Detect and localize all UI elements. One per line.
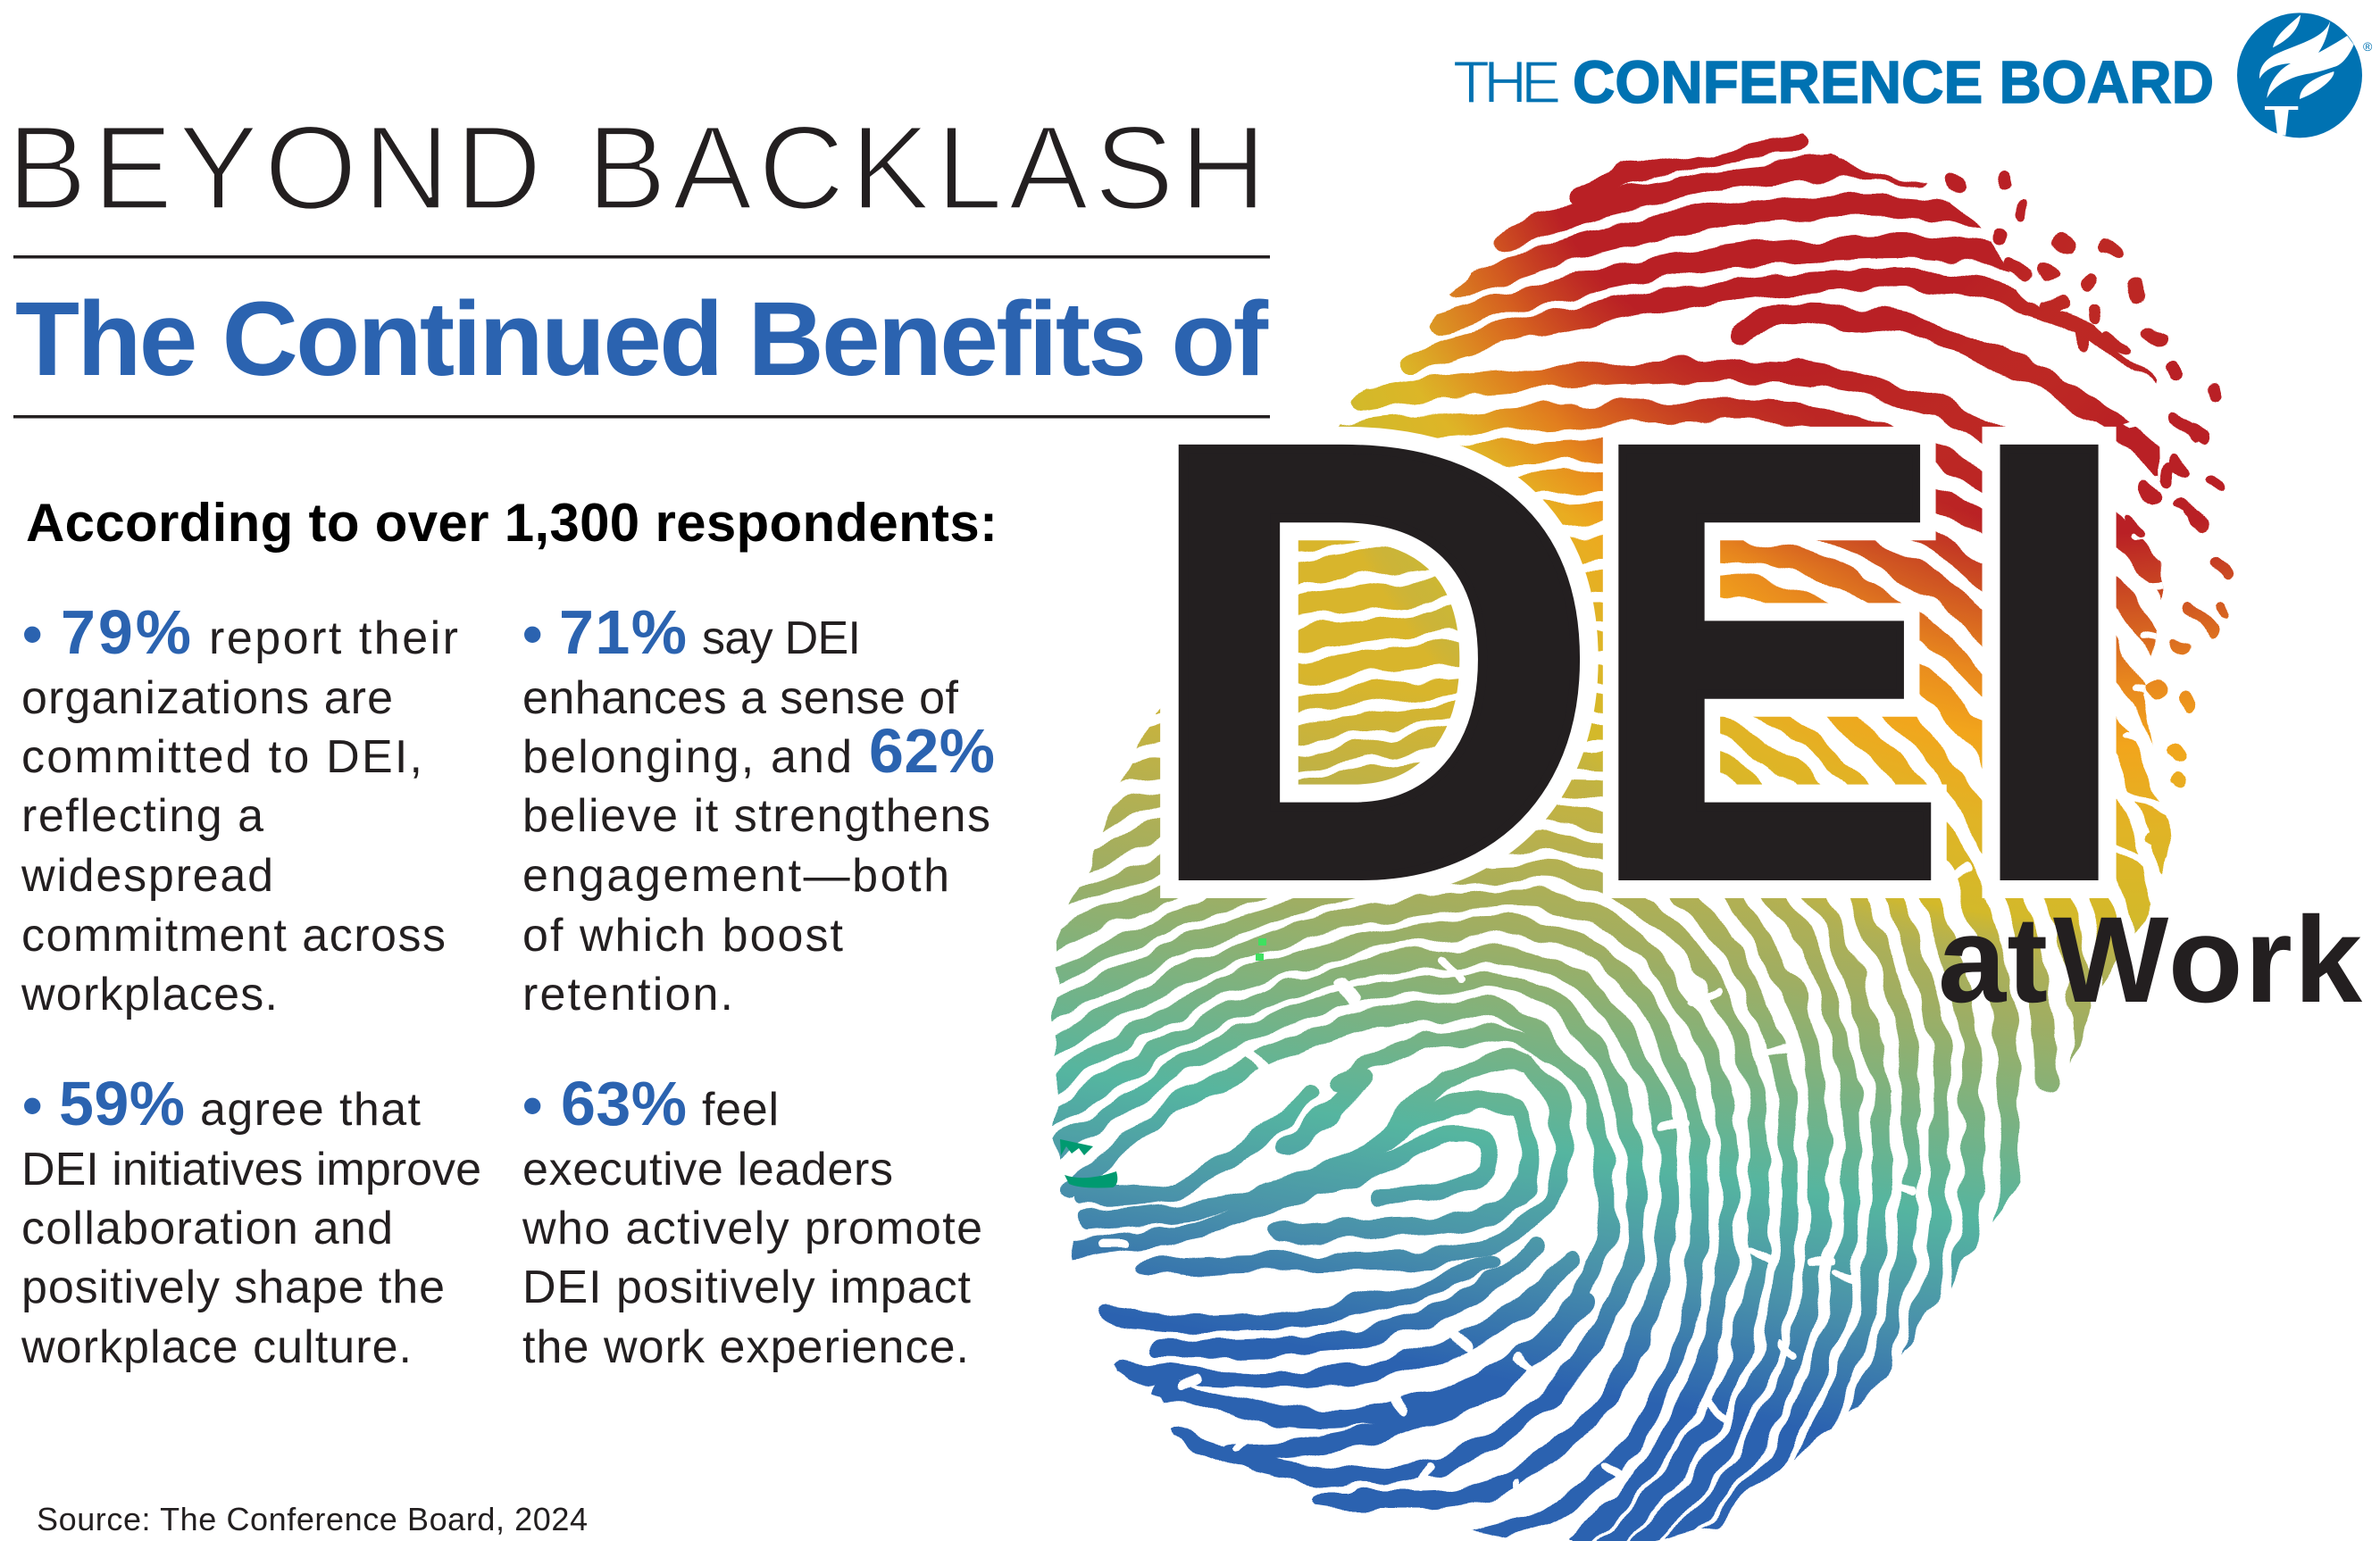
stat block: 63%: the work experience. [522, 1321, 969, 1373]
stat block: 63%: 63% [561, 1069, 687, 1138]
fingerprint graphic [1051, 134, 2234, 1541]
stat block: 63%: who actively promote [522, 1203, 982, 1254]
stat block: 59%: 59% [59, 1069, 185, 1138]
stat block: 79%: commitment across [21, 910, 446, 962]
small green edit marks [1256, 938, 1266, 961]
stat block: 79% [21, 597, 458, 1020]
stat block: 79%: report their [209, 612, 458, 664]
stat block: 71% and 62%: retention. [522, 969, 733, 1020]
bottom rule [13, 415, 1270, 418]
DEI letters with white outline: D [1140, 314, 1602, 1008]
stat block: 63%: • [522, 1073, 542, 1137]
stat block: 63% [522, 1069, 982, 1373]
stat block: 79%: reflecting a [21, 790, 263, 842]
stat block: 71% and 62%: belonging, and [522, 731, 852, 783]
stat block: 59%: collaboration and [21, 1203, 393, 1254]
DEI letters with white outline: I [1963, 315, 2135, 1008]
top rule [13, 255, 1270, 259]
stat block: 71% and 62%: • [522, 602, 542, 666]
title: Beyond Backlash: BEYOND BACKLASH [7, 102, 1266, 235]
stat block: 59%: workplace culture. [21, 1321, 412, 1373]
stat block: 79%: workplaces. [21, 969, 278, 1020]
stat block: 71% and 62%: 62% [869, 716, 995, 786]
source note: Source: The Conference Board, 2024 [37, 1501, 588, 1537]
intro heading: According to over 1,300 respondents: [26, 493, 998, 553]
stat block: 71% and 62%: engagement—both [522, 850, 949, 902]
at Work wordmark: Work [2053, 892, 2363, 1029]
stat block: 71% and 62%: 71% [559, 597, 687, 667]
stat block: 59%: DEI initiatives improve [21, 1144, 481, 1195]
stat block: 79%: committed to DEI, [21, 731, 422, 783]
fingerprint ridges with rainbow gradient [1051, 134, 2234, 1541]
stat block: 63%: feel [702, 1084, 779, 1136]
DEI letters with white outline: D [1140, 314, 1602, 1008]
DEI letters with white outline [1140, 314, 2135, 1008]
stat block: 79%: 79% [61, 597, 191, 667]
stat block: 59%: • [22, 1073, 42, 1137]
logo wordmark: The Conference Board: THE [1453, 49, 1561, 116]
stat block: 79%: organizations are [21, 672, 393, 724]
stat block: 63%: executive leaders [522, 1144, 893, 1195]
stat block: 71% and 62%: say DEI [702, 612, 861, 664]
stat block: 71% and 62%: believe it strengthens [522, 790, 990, 842]
stat block: 63%: DEI positively impact [522, 1262, 972, 1313]
subtitle: The Continued Benefits of: The Continued Benefits of [15, 280, 1269, 398]
stat block: 59%: positively shape the [21, 1262, 445, 1313]
stat block: 59%: agree that [200, 1084, 422, 1136]
DEI letters with white outline: E [1586, 315, 1949, 1008]
DEI letters with white outline: I [1963, 315, 2135, 1008]
logo wordmark: The Conference Board: CONFERENCE BOARD [1573, 49, 2214, 116]
stat block: 79%: • [22, 602, 42, 666]
stat block: 71% and 62% [522, 597, 995, 1020]
stat block: 79%: widespread [21, 850, 273, 902]
at Work wordmark: at [1938, 892, 2048, 1029]
registered mark: ® [2363, 39, 2373, 54]
stat block: 59% [21, 1069, 481, 1373]
stat block: 71% and 62%: of which boost [522, 910, 844, 962]
dark green ridge fragments [1060, 1139, 1117, 1187]
logo emblem: torch in blue circle [2237, 12, 2362, 137]
stat block: 71% and 62%: enhances a sense of [522, 672, 959, 724]
DEI letters with white outline: E [1586, 315, 1949, 1008]
